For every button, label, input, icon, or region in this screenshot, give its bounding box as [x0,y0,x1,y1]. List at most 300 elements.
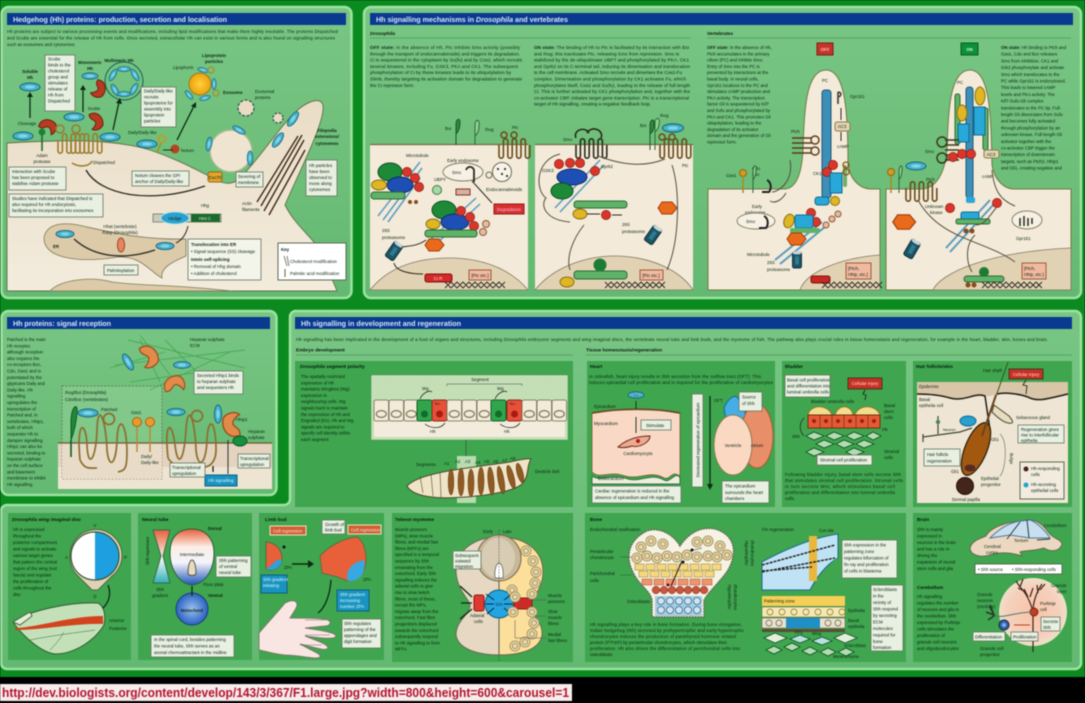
callout: epicardium [722,481,769,503]
reception text: potentiated by the [7,375,42,380]
callout: Scube [45,55,75,111]
callout: secreted Hhip1: Secreted Hhip1 binds [197,373,240,378]
text: Drosophila OFF state: phosphorylation of Ci by these kinases leads to its ubiquitylation by [370,70,512,75]
proteasome: proteasome [382,235,406,240]
reception text: both of which [7,425,33,430]
labels: Cdo [752,166,761,171]
blue box 2: increasing [340,598,361,603]
reception text: dampen signalling. [7,438,44,443]
Slimb and proteasome [622,202,677,245]
arrows [918,170,1015,272]
blue box 1 [261,575,289,593]
heading: Hair follicle/skin [916,364,953,370]
injury box [848,378,882,400]
reception text: upregulates the [7,400,38,405]
callout: Daily/Daily-like: assembly into [144,106,171,112]
cerebellum text: proliferation of [917,633,946,638]
lipoprotein particle: Lipophorin [173,65,194,70]
Hh on filopodia [270,110,301,149]
callout: particles along cytonemes: Hh particles [309,163,333,168]
bladder tissue: cells [884,455,894,460]
actin filaments [242,135,305,215]
sub-panel: teleost myotome [392,513,573,662]
text: vertebrate ON state: transcription of downstream [1001,152,1055,157]
label: filopodia [315,128,340,146]
callout: Studies: facilitating its incorporation into exosomes [12,208,94,213]
cross section: Medial [548,632,561,637]
bone text: osteoblasts. [590,652,613,657]
Hhip1 at surface [214,405,265,446]
exosomes [223,89,283,123]
epithelium diagram: *En [434,402,440,406]
callout: Studies: also required for Hh endocytosis, [12,202,76,207]
status badges OFF and ON: OFF [821,47,830,52]
text: fibres, and medial fast [395,540,439,545]
bladder tissue: Shh [792,434,800,439]
callout: Shh expression: fin ray and proliferation [844,562,889,567]
sub-panel: wing imaginal disc [8,513,131,660]
early endosome [443,158,483,182]
bone labels: chondrocytes [750,540,755,567]
injury box [1009,369,1043,394]
text: except the MPs, [395,603,426,608]
heart: Atrium [751,443,764,448]
text: vertebrate ON state: targets, such as Ptch2, Hhip1 [1001,159,1059,164]
heart [714,392,773,475]
epithelium diagram: Wg [497,386,504,391]
skin box: epithelia cell [919,403,943,408]
reception text: membrane to inhibit [7,476,46,481]
text: progenitors displaced [395,622,437,626]
bladder tissue: cells [884,415,894,420]
reception text: also requires the [7,356,40,361]
cerebellum text: granule cell neurons [917,640,957,644]
label: filopodia: extensions/ [315,134,340,139]
text: vertebrate ON state: Smo from inhibition. CK1 and [1001,58,1059,63]
callout: Daily/Daily-like: Daily/Daily-like [144,88,173,94]
neural tube: Intermediate [180,552,205,557]
larva: A8 [510,456,516,461]
labels: Boc [752,172,760,177]
cross section: pioneers [548,599,566,604]
lipoprotein particle [173,53,226,102]
key [278,243,346,280]
labels: proteasome [767,267,791,272]
intro text: Hh signalling has been implicated in the development of a host of organs and structures, including Drosophila embryonic segments and wing imaginal discs, the vertebrate neural tube and limb buds, and the myotome of fish. The pathway also plays crucial roles in tissue homeostasis and regeneration, for example in the heart, bladder, skin, bones and brain. [296,337,1048,342]
skin box [917,362,1068,503]
cerebellum cortex: cell [1040,607,1047,612]
bone text: proliferation. Hh also drives the differentiation of perichondral cells into [590,646,741,651]
label: ECM: Heparan sulphate [190,337,225,342]
heart: Source [742,394,756,400]
cleavage by Adam protease: Adam [36,153,48,158]
brain legend: • Shh source [978,567,1004,572]
callout: cardiac regeneration: absence of epicardium and Hh signalling [595,495,675,500]
intro text: Hh proteins are subject to various processing events and modifications, including lipid modifications that make them highly insoluble. The proteins Dispatched [7,29,339,34]
brain diagram: cortex [986,550,999,555]
bone text: Hh signalling plays a key role in bone formation. During bone elongation, [590,622,742,627]
callout: outward migration [453,551,481,569]
molecule: soluble Hh: Hh [27,75,33,80]
proteasome and repressor [792,251,882,288]
text: Drosophila OFF state: through the transport of endocannabinoids) and triggers its degradation. [370,51,520,56]
cross section: Slow [548,609,558,614]
text: emanating from the [395,565,433,570]
sub-panel: brain [913,513,1072,662]
callout: particles along cytonemes: cytonemes [309,187,331,192]
text: vertebrate ON state: Gas1, Cdo and Boc releases [1001,52,1058,57]
callout: Adam [9,167,66,190]
heading: mechanisms: Hh signalling mechanisms in Drosophila and vertebrates [376,15,568,24]
callout: epicardium: The epicardium [725,484,756,488]
box: translocation: Translocation into ER [191,242,237,247]
nucleus [370,258,528,290]
text: signals are required to [301,424,345,429]
labels: AC3 [838,124,847,129]
intro text: such as exosomes and cytonemes. [7,42,76,47]
Hh precursor: Hint C [199,216,211,221]
reception text: Cdo, Gas1 and is [7,368,42,374]
skin box: Sebaceous gland [1016,415,1050,420]
Gas1 and Daily: Daily/ [141,454,153,459]
text: that stimulates stromal cell proliferation. Stromal cells [785,478,904,483]
text: Engrailed (En). Hh and Wg [301,418,354,423]
Gli complex at base [775,208,841,264]
larva: A1 [444,461,450,466]
heading: Limb bud [265,517,287,523]
subheading: tissue: Tissue homeostasis/regeneration [586,348,662,354]
text: the proliferation of [13,579,49,584]
callout: Notum cleaves GPI: Notum cleaves the GPI [135,173,180,178]
molecule: monomeric Hh: Monomeric [78,60,102,65]
callout: Studies [9,194,103,217]
callout: hair follicle: Hair follicle [927,452,949,457]
text: proliferation and differentiation into luminal umbrella [785,490,896,495]
lipoprotein particle: Lipoprotein [202,53,226,58]
heading: mechanisms [370,13,1073,25]
text: expressed in [917,534,942,538]
text: in turn secrete Wnt, which stimulates basal cell [785,484,895,489]
text: disc [13,592,22,597]
text: migrate away from the [395,609,439,614]
labels: Endochondral ossification [590,527,641,532]
fin regeneration: Wng [812,631,822,636]
callouts [322,520,381,534]
text: vertebrate ON state: activator together with the [1001,139,1052,144]
cerebellum text: and oligodendrocytes [917,646,960,651]
cleavage by Adam protease [13,116,59,164]
text: driving the [917,553,938,558]
text: Drosophila ON state: stabilized by the de-ubiquitinase UBP7 and phosphorylated by PKA. CK1 [534,58,689,63]
callout: AER: Cell regression [273,528,303,534]
callout: Scleroblasts: in the [873,594,884,598]
endoplasmic reticulum [44,224,232,291]
callout: Studies: Studies have indicated that Dispatched is [12,196,93,201]
Gpr161 endosome [1012,211,1042,241]
text: Drosophila OFF state: Ci is sequestered in the cytoplasm by Su(fu) and by Cos2, which recruits [370,58,523,63]
bone labels: Hypertrophic [727,585,732,610]
callout: patterning: of ventral [219,564,237,569]
cerebellum text: of neurons and glia in [917,607,960,612]
cerebellum heading: Cerebellum [917,585,943,591]
bladder tissue: Stromal [884,449,899,454]
callout: patterning: neural tube [219,570,242,575]
larva: A3 [465,459,471,464]
text: notochord. Fast fibre [395,615,436,620]
heart: of Shh [742,401,755,406]
text: Drosophila ON state: ON state: The binding of Hh to Ptc is facilitated by its interaction with Boi [534,45,689,50]
text: vertebrate OFF state: Entry of Smo into the PC is [707,64,761,69]
heading: Teleost myotome [395,517,434,523]
exosomes: proteins [255,95,271,100]
diagram: Drosophila OFF cell [370,119,530,290]
status badges OFF and ON [817,43,978,55]
heading: production [7,13,346,25]
larva: A7 [502,458,508,463]
text: vertebrate ON state: PC while Gpr161 is endocytosed. [1001,78,1066,84]
Ci activator in nucleus [560,258,665,288]
text: Drosophila ON state: and Ihog; this inactivates Ptc, releasing Smo from repression. Smo is [534,51,680,56]
bladder tissue: Basal [884,403,895,408]
cross section: fast fibres [548,638,568,643]
myocardium: Myocardium [594,421,618,426]
cerebellum cortex [977,578,1067,657]
skin box: Basal [919,397,930,402]
key: Cholesterol modification [290,259,337,264]
text: cells throughout the [13,586,52,590]
label: microtubule: Microtubule [406,153,429,158]
heart: OFT [714,398,723,403]
epithelium diagram: Wg [422,386,429,391]
text: vertebrate OFF state: and Sufu and phosphorylated by [707,108,771,113]
reception text: on the cell surface [7,463,43,468]
callout: Notum cleaves GPI [132,171,189,186]
labels: Gpr161 [850,94,865,99]
Smo active: Smo [925,149,935,154]
callout: secreted Hhip1 [194,371,243,394]
skin box: progenitor [981,482,1001,487]
brain diagram [970,520,1067,556]
Boi and Ihog: Boi [445,126,451,131]
skin box: Bulge [1009,453,1014,465]
legend: Hh-secreting [1031,482,1056,487]
cerebellum cortex: Granule cell [980,646,1003,651]
callouts: limb bud [325,528,342,532]
Hh precursor: Hedge [169,216,182,221]
label: filopodia: cytonemes [316,141,339,146]
callout: secreted Hhip1: to heparan sulphate [197,379,236,384]
larva: A5 [484,459,490,464]
callout: Shh regulates: appendages and [344,633,377,638]
text: neurons in the brain [917,540,956,545]
cerebellum cortex: Purkinje [1040,601,1056,606]
Ihog/Boi and Patched group: Ihog/Boi (Drosophila) [65,390,107,395]
cerebellum cortex: layer [1057,589,1067,594]
callout: cardiac regeneration: Cardiac regeneration is reduced in the [595,488,670,494]
reception text: Patched is the main [7,337,46,342]
text: fibres, most of these, [395,596,436,601]
callout: spinal cord: axonal chemoattractant in the midline [154,650,227,655]
text: and signals to activate [13,546,57,552]
bone labels: Hypertrophic [744,541,749,566]
subheading: Drosophila: Drosophila [370,31,395,37]
legend: Hh-responding [1031,466,1060,471]
callout: Scleroblasts [871,585,903,651]
heading: Bladder [785,364,803,370]
Smo: Smo [563,137,573,142]
text: fibres (MFFs) are [395,546,429,551]
imaginal disc: V [94,523,97,528]
cerebellum cortex: (excitory) [977,604,996,609]
text: vertebrate OFF state: prevented by interactions at the [707,70,769,75]
myocardium: Stimulate [646,423,665,428]
hourglass gradient: gradient [152,593,169,598]
Smo degradation box: Degradation [497,207,522,212]
subheading: Vertebrates: Vertebrates [707,31,733,37]
ER contents: ER [53,244,60,249]
reception text: Hhip1 can also be [7,444,43,449]
callout: Shh expression: of cells in blastema [844,568,882,574]
early endosome: Early endosome [447,158,479,163]
text: expression in [301,393,327,398]
cerebellum cortex: Granule [977,592,993,597]
text: Drosophila ON state: complex. Dimerisation and phosphorylation by CK1 activates Fu, which [534,76,686,82]
brain legend: • Shh-responding cells [1012,567,1057,572]
callout: Scleroblasts: required for [873,632,896,638]
cross section [456,529,568,662]
myocardium: Endocardium [598,476,624,481]
heading: development [295,317,1072,329]
box: translocation: • Removal of Hhg domain [191,264,241,269]
nucleus [800,255,880,290]
axoneme [822,90,831,198]
text: maintains Wingless (Wg) [301,387,350,392]
brain legend [975,564,1062,574]
callout: regeneration: Regeneration gives [1021,427,1060,432]
early endosome: Smo [452,170,462,175]
proteasome and repressor: Hhip, etc.] [848,272,868,277]
brain diagram: Tectum [1014,538,1028,543]
labels: cAMP [837,144,849,149]
callouts: transcriptional upregulation: upregulation [240,462,265,467]
neural tube: Dorsal [208,526,222,531]
cross section: Early [483,529,494,534]
ER contents [53,224,188,256]
status badges OFF and ON: ON [966,47,973,52]
proteasome: 26S [382,228,390,233]
callout: Scube: cholesterol [48,68,69,74]
text: rise to slow twitch [395,590,430,595]
wing [13,585,127,654]
sub-panel: hair follicle [913,361,1072,507]
notochord: Notochord [181,608,203,613]
fin regeneration: Fin regeneration [762,527,795,532]
text: vertebrate OFF state: Ptch accumulates in the primary [707,51,770,56]
text: vertebrate OFF state: PKA and CK1. This promotes Gli [707,114,771,119]
cross section: muscle [548,615,562,620]
Smo complex: Gprk2 [601,164,614,169]
text: Shh is mainly [917,527,944,532]
molecule: monomeric Hh: Scube [88,106,101,111]
ER contents: Rasp (Drosophila) [102,230,138,235]
Ihog/Boi and Patched group: Cdo/Boc (vertebrates) [65,397,108,402]
orange hex, proteasome [893,215,921,259]
callout: Scleroblasts: ECM [873,620,883,624]
text: (MPs), slow muscle [395,533,434,538]
nucleus [535,256,693,290]
Exo70 and severing: membrane [238,180,260,185]
Smo active: cAMP [982,174,994,179]
Gas1 and Daily: Gas1 [131,410,142,415]
heading: Brain [917,517,929,523]
reception text: co-receptors Boc, [7,362,41,367]
callout: Scube: binds to the [48,62,71,68]
text: subsequently respond [395,634,439,639]
bone text: chondrocytes induces the production of parathyroid hormone related [590,634,737,639]
text: signalling induces the [395,577,438,582]
text: vertebrate OFF state: PKA activity. The transcription [707,95,765,100]
legend: cells [1031,472,1041,477]
panel: development and regeneration [1,311,1081,669]
actin filaments: filaments [242,207,260,212]
callouts: Differentiation, Proliferation, Secrete Shh: Secrete [1043,619,1059,624]
callouts: Cell regression [351,528,381,532]
Smo degradation box [472,181,524,214]
text: vertebrate ON state: length Gli dissociates from Sufu [1001,112,1063,117]
neural tube: Ventral [208,593,223,598]
callout: epicardium: surrounds the heart [725,490,764,495]
callout: patterning [216,556,251,577]
first limb bud [266,542,292,570]
heading: Drosophila segment polarity [300,364,365,370]
callout: Scleroblasts: vicinity of [873,600,892,605]
callout: particles along cytonemes: move along [309,181,332,186]
text: vertebrate OFF state: basal body. In neural cells, [707,76,759,82]
Ci activator in nucleus: [Ptc etc.] [642,273,660,278]
molecule: multimeric Hh ring [100,58,143,141]
Gas1, Boc and endosome [737,160,791,229]
Gas1 and Daily [131,410,159,465]
reception text: signalling [7,394,26,399]
callout: hair follicle [924,449,960,466]
bone labels: Periarticular [590,549,614,554]
text: stem cells and glia [917,566,954,571]
Ihog/Boi and Patched group [65,390,127,472]
bone labels: chondrocytes [733,584,738,611]
larva [407,456,560,503]
fin regeneration: Patterning zone [764,598,795,604]
fin regeneration: Cut site [819,528,834,533]
fin regeneration: Basal [848,618,859,623]
bone labels: cells [590,578,600,583]
labels: 26S [767,260,775,265]
epithelium diagram: Hh [504,429,510,434]
Gpr161 endosome: Gpr161 [1016,236,1031,241]
fin regeneration: FFs [795,630,803,635]
key: Key [281,247,290,252]
callout: Scube: Hh from [48,92,64,98]
exosomes: Exosomal [255,89,274,94]
fin regeneration: Epithelia [848,608,865,613]
labels: CK1 [813,171,822,176]
Boi, Ihog, Ptc, Hh: Ptc [682,163,689,168]
box: translocation [188,239,261,280]
callout: regeneration: rise to interfollicular [1021,432,1059,438]
text: vertebrate ON state: levels and PKA activity. The [1001,92,1055,97]
callout: regeneration: epithelia [1021,438,1038,443]
Smo complex [542,158,614,212]
actin filaments: Actin [242,201,252,206]
